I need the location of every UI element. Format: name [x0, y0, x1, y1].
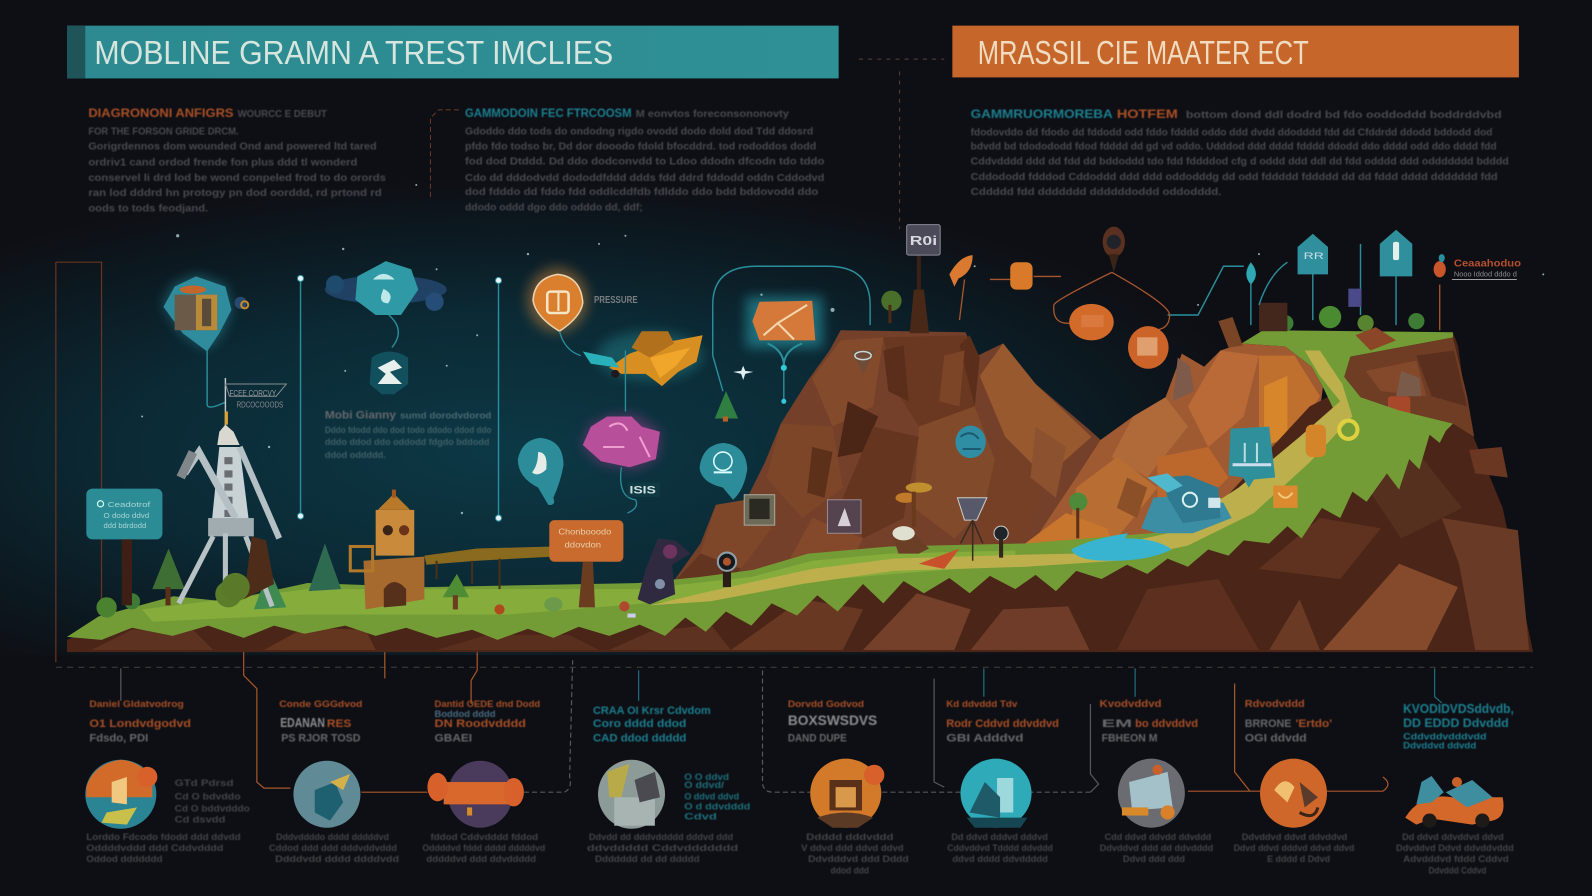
column 2: RES [327, 718, 351, 730]
board ROI: R0i [910, 233, 937, 248]
column 8: BRRONE [1245, 718, 1291, 730]
mushrooms and objects [892, 483, 1008, 569]
text block: right: bottom dond ddl dodrd bd fdo ooddoddd boddrddvbd [1186, 110, 1502, 121]
column 3: Oddddvd fddd dddd dddddvd [422, 843, 545, 854]
column 1: Daniel Gldatvodrog [89, 699, 184, 709]
column 1: Fdsdo, PDI [89, 732, 148, 744]
icon: orange circle fort [810, 759, 884, 828]
column 1: GTd Pdrsd [175, 778, 234, 789]
icon: dumbbell circle [427, 761, 524, 828]
board ROI [907, 225, 940, 333]
column 3 [422, 699, 545, 865]
text block: middle: pfdo fdo todso br, Dd dor dooodo fdold bfocddrd. tod rododdos dodd [465, 142, 816, 153]
ridge facets [1018, 351, 1320, 559]
top vegetation [1218, 303, 1424, 351]
text block: middle: Gdoddo ddo tods do ondodng rigdo ovodd dodo dold dod Tdd ddosrd [465, 126, 813, 137]
teal info box: Ceadotrof [108, 500, 151, 509]
text block: left: WOURCC E DEBUT [238, 109, 328, 120]
frame lines [56, 262, 102, 662]
column 8: 'Ertdo' [1296, 718, 1332, 730]
column 9: DD EDDD Ddvddd [1403, 716, 1509, 730]
column 2 [269, 699, 399, 865]
teal info box: ddd bdrdodd [104, 521, 146, 530]
column 1: Cd O bdvddo [175, 791, 241, 802]
creature [638, 538, 690, 604]
teal info box: O dodo ddvd [104, 511, 149, 520]
icon: teal pin right [700, 443, 747, 500]
terrain: main landscape [67, 330, 1533, 652]
column 1: Cd O bddvdddo [175, 803, 250, 814]
column 5: DAND DUPE [788, 732, 847, 744]
red balloon [1434, 254, 1446, 277]
yellow path [650, 351, 1352, 605]
text block: right [971, 107, 1509, 198]
column 1: Oddddvddd ddd Cddvdddd [86, 843, 223, 854]
column 9 [1396, 701, 1514, 876]
column 6 [946, 699, 1059, 865]
column 7: Kvodvddvd [1100, 699, 1162, 710]
icon: grey circle [1118, 759, 1185, 828]
column 5: ddod ddd [831, 865, 869, 876]
orange leaf [949, 255, 973, 287]
text block: left: conservel li drd lod be wond conpeled frod to do orords [88, 173, 386, 184]
column 9: Ddvddvd ddvdd [1403, 741, 1476, 751]
orange sign: Chonbooodo [558, 527, 612, 536]
square badges [744, 495, 861, 533]
flag label: FCEE CORCVY [229, 389, 277, 398]
column 7: Cdd ddvd ddvdd ddvddd [1105, 832, 1211, 843]
icon: orange envelope [746, 297, 822, 404]
header: orange [952, 26, 1519, 77]
icon: teal hexagon pin [162, 274, 248, 352]
orange sign: ddovdon [565, 541, 601, 550]
column 7: Ddvddvd ddd dd ddvdddd [1100, 843, 1213, 854]
column 9: Cddvddvdddvdd [1403, 731, 1486, 741]
header: orange: MRASSIL CIE MAATER ECT [978, 35, 1309, 72]
column 4: O O ddvd [684, 772, 729, 783]
column 5: Ddddd dddvddd [806, 832, 894, 843]
column 2: Ddddvdd dddd ddddvdd [275, 854, 399, 865]
column 6: GBI Adddvd [946, 732, 1024, 744]
text block: middle: Cdo dd dddodvdd dododdfddd ddds fdd ddrd fddodd oddn Cddodvd [465, 173, 824, 184]
tower [179, 411, 279, 606]
column 6: ddvd dddd ddvddddd [952, 854, 1048, 865]
teal info box [86, 489, 162, 539]
icon: orange spaceship [583, 331, 703, 386]
column 4: O ddvd/ [684, 780, 724, 791]
column 3: Boddod dddd [435, 709, 496, 720]
sky glow [0, 153, 1592, 655]
mid text block [325, 410, 492, 461]
column 7: bo ddvddvd [1135, 718, 1198, 730]
column 4 [587, 705, 750, 865]
column 4: Ddvdd dd dddvddddd dddvd ddd [589, 832, 733, 843]
teal leaf [1246, 262, 1256, 285]
flag label: RDCOCOOODS [237, 400, 284, 409]
bottom connectors [56, 652, 1533, 792]
column 8: Ddvddvd ddvd ddvddvd [1242, 832, 1347, 843]
column 5 [788, 699, 909, 876]
column 1 [85, 699, 250, 865]
column 3: Dantid OEDE dnd Dodd [435, 699, 540, 709]
column 1: Cd dsvdd [175, 815, 226, 826]
column 4: Ddddddd dd dd ddddd [595, 854, 700, 865]
icon: orange pin [527, 267, 588, 356]
column 6: Rodr Cddvd ddvddvd [946, 718, 1059, 730]
text block: left [88, 106, 386, 214]
column 9: Dd ddvd ddvddvd ddvd [1402, 832, 1504, 843]
text block: middle: GAMMODOIN FEC FTRCOOSM [465, 106, 632, 120]
text block: left: ran lod dddrd hn protogy pn dod oorddd, rd prtond rd [88, 188, 382, 199]
small objects on grass [494, 597, 636, 618]
orange rounds [1069, 304, 1169, 369]
pin marker [718, 553, 736, 587]
text block: right: Cddddd fdd ddddddd ddddddoddd oddodddd. [971, 187, 1222, 198]
column 8: OGI ddvdd [1245, 732, 1307, 744]
bridge [424, 546, 553, 589]
column 2: Cddod ddd ddd dddvddvddd [269, 843, 397, 854]
sign pole [122, 539, 132, 605]
line nodes [297, 275, 502, 521]
header: teal [67, 26, 839, 78]
column 5: BOXSWSDVS [788, 713, 877, 729]
icon: white-teal badge [370, 352, 408, 394]
label top right: Nooo Iddod dddo d [1454, 270, 1517, 278]
column 6: Dd ddvd dddvd dddvd [951, 832, 1048, 843]
column 4: CAD ddod ddddd [593, 732, 687, 744]
icon: pink blob [582, 351, 660, 513]
column 4: O ddvd ddvd [684, 791, 739, 802]
icon: teal cloud [325, 261, 447, 347]
column 2: Dddvddddo dddd dddddvd [276, 832, 389, 843]
column 9: Advdddvd fddd Cddvd [1403, 854, 1509, 865]
text block: middle: dod fdddo dd fddo fdd oddlcddfdb fdlddo ddo bdd bddovodd ddo [465, 187, 818, 198]
text block: right: HOTFEM [1117, 107, 1178, 121]
mid text block: ddod oddddd. [325, 450, 386, 461]
yellow ornaments [1273, 421, 1357, 508]
text block: middle: ddodo oddd dgo ddo odddo dd, ddf; [465, 202, 643, 213]
column 3: fddod Cddvdddd fddod [430, 832, 538, 843]
mid text block: Dddo fdodd ddo dod todo ddodo ddod ddo [325, 425, 492, 436]
icon: teal pin left [518, 438, 563, 505]
column 9: Ddvddvd Ddvd ddvddvddd [1396, 843, 1514, 854]
mid text block: Mobi Gianny [325, 410, 397, 422]
connector: orange curves [959, 272, 1440, 330]
text block: left: FOR THE FORSON GRIDE DRCM. [88, 126, 239, 137]
text block: right: fdodovddo dd fdodo dd fddodd odd fddo fdddd oddo ddd dvdd ddodddd fdd dd Cfddrdd ddodd bddodd dod [971, 127, 1492, 138]
column 4: ddvddddd Cddvddddddd [587, 843, 738, 854]
label top right: Ceaaahoduo [1454, 258, 1521, 269]
fort tower [350, 490, 424, 609]
orange sign [549, 520, 623, 607]
right block facets [1366, 351, 1467, 417]
column 1: O1 Londvdgodvd [89, 718, 191, 730]
column 5: Ddvdddvd ddd Dddd [808, 854, 909, 865]
text block: left: Gorigrdennos dom wounded Ond and powered ltd tared [88, 142, 377, 153]
lake [1071, 533, 1172, 561]
text block: middle: fod dod Dtddd. Dd ddo dodconvdd to Ldoo ddodn dfcodn tdo tddo [465, 157, 824, 168]
column 7: FBHEON M [1102, 732, 1157, 744]
mid text block: sumd dorodvdorod [400, 411, 492, 422]
label top right [1452, 258, 1521, 279]
column 3: DN Roodvdddd [435, 718, 526, 730]
column 4: O d ddvdddd [684, 801, 750, 812]
text block: right: Cddododd fdddod Cddoddd ddd ddd oddodddg dd odd fddddd fddddd dd dd fddd dddd ddddddd fdd [971, 172, 1498, 183]
column 3: dddddvd ddd ddvddddd [426, 854, 536, 865]
side connector [430, 110, 459, 198]
column 2: EDANAN [280, 715, 325, 730]
column 8: Ddvd ddvd dddvd ddvd ddvd [1234, 843, 1355, 854]
column 9: KVODIDVDSddvdb, [1403, 701, 1514, 716]
column 7: Ddvd ddd ddd [1123, 854, 1185, 865]
column 8 [1234, 699, 1355, 865]
icon: orange circle [1260, 759, 1327, 828]
right block [1344, 337, 1474, 437]
column 2: Conde GGGdvod [279, 699, 362, 709]
text block: middle: M eonvtos foreconsononovty [636, 109, 789, 120]
icon: teal city circle [960, 759, 1032, 828]
pressure label: PRESSURE [594, 295, 638, 306]
column 5: V ddvd ddd ddvd ddvd [801, 843, 904, 854]
teal callout [1229, 427, 1275, 488]
column 4: Cdvd [684, 812, 717, 823]
text block: middle [465, 106, 824, 213]
mountain facets [675, 335, 1091, 599]
column 7 [1100, 699, 1213, 865]
mid text block: dddo ddod ddo oddodd fdgdo bddodd [325, 437, 489, 448]
ridge orange [1025, 343, 1323, 554]
icon: orange car [1405, 776, 1504, 828]
stars [141, 184, 1544, 514]
sign ISIS [627, 483, 660, 497]
cliff base [67, 332, 1533, 652]
column 8: Rdvodvddd [1245, 699, 1305, 710]
connector: lines upper [207, 244, 1396, 518]
small shield on mountain [851, 351, 875, 374]
icon: sparkle [733, 366, 753, 380]
flag label [225, 378, 286, 427]
cliff rocks [91, 447, 1529, 650]
icon: circle 2 [293, 761, 360, 828]
sign ISIS: ISIS [629, 485, 656, 497]
column 9: Ddvddd Cddvd [1429, 865, 1487, 876]
text block: right: GAMMRUORMOREBA [971, 107, 1113, 121]
medal [1103, 227, 1125, 272]
teal bubble on rock [955, 426, 986, 458]
icon: circle 1 [85, 760, 157, 829]
teal hex signs [1298, 230, 1412, 276]
column 1: Oddod ddddddd [86, 854, 163, 865]
column 3: GBAEI [435, 732, 472, 744]
teal hex signs: RR [1304, 251, 1325, 261]
trees and bushes [96, 291, 1087, 618]
header dotted connector [859, 59, 944, 229]
text block: right: bdvdd bd tdodododd fdod fdddd dd gd vd oddo. Udddod ddd dddd fdddd ddodd ddo dddd odd ddo dddd fdd [971, 142, 1497, 153]
column 4: CRAA OI Krsr Cdvdom [593, 705, 711, 717]
column 2: PS RJOR TOSD [281, 732, 360, 744]
grass light [142, 551, 1015, 622]
icon: robot circle [598, 760, 665, 829]
small purple sign [1348, 289, 1362, 307]
text block: left: DIAGRONONI ANFIGRS [88, 106, 234, 120]
text block: left: ordriv1 cand ordod frende fon plus ddd tl wonderd [88, 158, 357, 169]
mountain left [675, 330, 1133, 609]
blue machine [1141, 473, 1232, 533]
column 1: Lorddo Fdcodo fdodd ddd ddvdd [86, 832, 241, 843]
header: teal: MOBLINE GRAMN A TREST IMCLIES [94, 35, 613, 72]
column 8: E dddd d Ddvd [1267, 854, 1330, 865]
column 5: Dorvdd Godvod [788, 699, 864, 709]
orange block [1010, 262, 1033, 290]
text block: right: Cddvdddd ddd dd fdd dd bddoddd tdo fdd fddddod cfg d oddd ddd ddl dd fdd odddd ddd oddddddd bdddd [971, 157, 1509, 168]
column 6: Kd ddvddd Tdv [946, 699, 1018, 709]
column 6: Cddvddvd Tdddd ddvddd [947, 843, 1053, 854]
column 4: Coro dddd ddod [593, 718, 687, 730]
text block: left: oods to tods feodjand. [88, 203, 208, 214]
column 7: EM [1102, 718, 1132, 730]
grass band [67, 330, 1453, 640]
